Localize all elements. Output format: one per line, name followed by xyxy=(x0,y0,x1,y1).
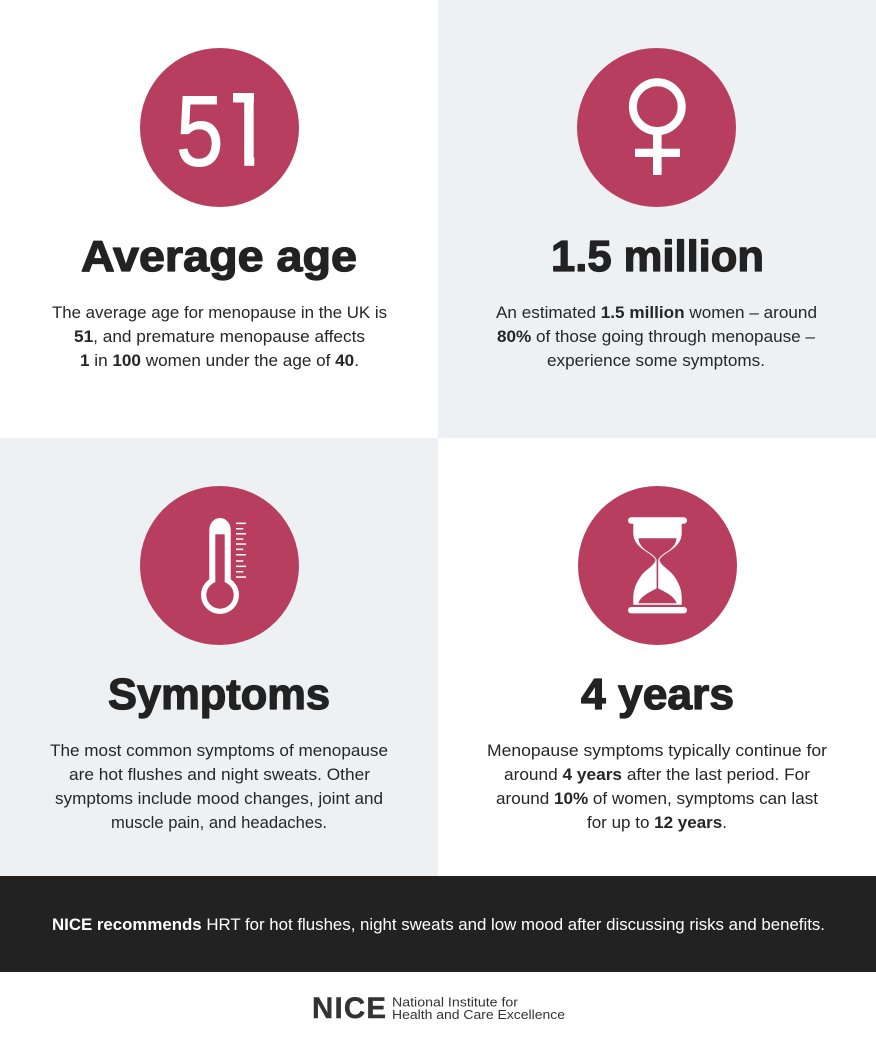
text block: symptoms: muscle pain, and headaches. xyxy=(111,813,327,832)
banner: NICE recommendation xyxy=(0,876,876,972)
text block: 4 years: around 4 years after the last period. For xyxy=(504,765,810,784)
text block: 4 years xyxy=(487,741,827,832)
icon: number 51 in circle xyxy=(140,48,299,207)
text block: average age: 51, and premature menopause affects xyxy=(74,327,365,346)
heading: average age: Average age xyxy=(81,232,357,281)
icon: number 51 in circle: 5 xyxy=(176,76,224,188)
text block: 1.5 million: 80% of those going through menopause – xyxy=(497,327,816,346)
text block: average age: 1 in 100 women under the age of 40. xyxy=(80,351,359,370)
text block: symptoms: symptoms include mood changes, joint and xyxy=(55,789,383,808)
text block: symptoms: are hot flushes and night sweats. Other xyxy=(69,765,370,784)
logo: NICE: National Institute for xyxy=(392,996,518,1010)
text block: 4 years: around 10% of women, symptoms can last xyxy=(496,789,818,808)
text block: symptoms xyxy=(50,741,388,832)
text block: 4 years: Menopause symptoms typically continue for xyxy=(487,741,827,760)
heading: 1.5 million: 1.5 million xyxy=(551,232,764,281)
text block: symptoms: The most common symptoms of menopause xyxy=(50,741,388,760)
heading: symptoms: Symptoms xyxy=(108,670,330,719)
text block: average age xyxy=(52,303,387,370)
text block: average age: The average age for menopause in the UK is xyxy=(52,303,387,322)
logo: NICE: NICE xyxy=(312,992,386,1025)
heading: 4 years: 4 years xyxy=(581,670,734,719)
panel: 1.5 million xyxy=(438,0,876,438)
text block: 4 years: for up to 12 years. xyxy=(587,813,727,832)
logo: NICE: Health and Care Excellence xyxy=(392,1008,565,1022)
logo: NICE xyxy=(312,992,565,1025)
icon: female symbol in circle xyxy=(577,48,736,207)
panel: average age xyxy=(52,48,386,370)
text block: 1.5 million: An estimated 1.5 million women – around xyxy=(496,303,817,322)
icon: hourglass in circle xyxy=(578,486,737,645)
icon: thermometer in circle xyxy=(140,486,299,645)
panel: symptoms xyxy=(0,438,438,876)
text block: 1.5 million xyxy=(496,303,817,370)
banner: NICE recommendation: NICE recommends HRT for hot flushes, night sweats and low mood after discussing risks and benefits. xyxy=(52,915,825,934)
icon: number 51 in circle: 1 xyxy=(218,72,276,188)
text block: 1.5 million: experience some symptoms. xyxy=(547,351,765,370)
panel: 4 years xyxy=(438,438,876,876)
